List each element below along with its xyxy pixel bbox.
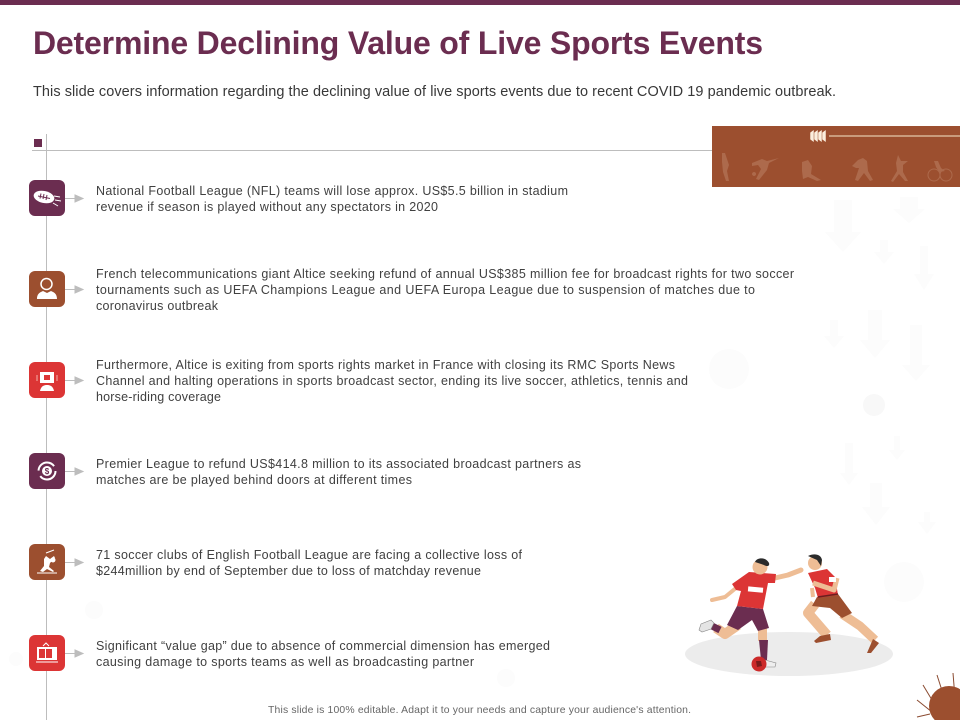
player one <box>699 558 801 672</box>
icon: broadcast monitor <box>29 362 65 398</box>
arrow <box>65 468 83 475</box>
shorts <box>727 606 769 631</box>
item 1: NFL stadium revenue <box>29 180 568 216</box>
arrow <box>65 559 83 566</box>
front leg <box>758 628 767 641</box>
icon: dollar cycle <box>29 453 65 489</box>
title: Determine Declining Value of Live Sports Events <box>33 25 763 61</box>
shorts <box>812 594 852 618</box>
icon: television <box>29 635 65 671</box>
text: tournaments such as UEFA Champions League and UEFA Europa League due to suspension of matches due to <box>96 283 755 297</box>
text <box>96 358 688 404</box>
subtitle: This slide covers information regarding the declining value of live sports events due to recent COVID 19 pandemic outbreak. <box>33 84 836 100</box>
top bar <box>0 0 960 5</box>
icon: headset agent <box>29 271 65 307</box>
jersey <box>808 569 838 598</box>
head <box>808 556 822 570</box>
back leg <box>716 625 738 634</box>
ground shadow <box>685 632 893 676</box>
text: Significant “value gap” due to absence of commercial dimension has emerged <box>96 639 550 653</box>
legs <box>808 604 827 635</box>
item 4: Premier League refund <box>29 453 581 489</box>
text: $244million by end of September due to loss of matchday revenue <box>96 564 481 578</box>
text: Channel and halting operations in sports broadcast sector, ending its live soccer, athletics, tennis and <box>96 374 688 388</box>
icon: football <box>29 180 65 216</box>
item 5: English Football League loss <box>29 544 523 580</box>
sports silhouettes <box>722 153 952 182</box>
text: National Football League (NFL) teams will lose approx. US$5.5 billion in stadium <box>96 184 568 198</box>
rear arm <box>812 588 813 597</box>
jersey <box>732 572 776 609</box>
timeline axis <box>32 134 712 720</box>
head <box>752 560 768 574</box>
text: Premier League to refund US$414.8 million to its associated broadcast partners as <box>96 457 581 471</box>
text: revenue if season is played without any spectators in 2020 <box>96 200 438 214</box>
arrow <box>65 377 83 384</box>
background: faint falling arrows and virus shapes <box>9 197 936 687</box>
text: Furthermore, Altice is exiting from sports rights market in France with closing its RMC Sports News <box>96 358 675 372</box>
text <box>96 267 794 313</box>
item 3: Altice exits sports rights <box>29 358 688 404</box>
player two <box>808 554 879 653</box>
illustration: two soccer players <box>685 554 893 676</box>
icon: virus corner <box>917 673 960 720</box>
axis marker square <box>34 139 42 147</box>
arrow <box>65 286 83 293</box>
text: matches are be played behind doors at different times <box>96 473 412 487</box>
text: French telecommunications giant Altice seeking refund of annual US$385 million fee for broadcast rights for two soccer <box>96 267 794 281</box>
arm <box>813 578 837 590</box>
text <box>96 457 581 487</box>
arms <box>712 588 736 600</box>
item 2: Altice refund <box>29 267 794 313</box>
text: 71 soccer clubs of English Football League are facing a collective loss of <box>96 548 523 562</box>
ball <box>752 656 766 672</box>
arrow <box>65 195 83 202</box>
footer note: This slide is 100% editable. Adapt it to your needs and capture your audience's attention. <box>268 705 691 716</box>
text: causing damage to sports teams as well as broadcasting partner <box>96 655 474 669</box>
text <box>96 639 550 669</box>
icon: soccer player kick <box>29 544 65 580</box>
icon: dollar cycle: $ <box>45 467 50 476</box>
item 6: value gap <box>29 635 550 671</box>
text <box>96 548 523 578</box>
banner: sports silhouettes <box>712 126 960 187</box>
text <box>96 184 568 214</box>
text: coronavirus outbreak <box>96 299 219 313</box>
arrow <box>65 650 83 657</box>
text: horse-riding coverage <box>96 390 221 404</box>
shoes <box>814 634 831 643</box>
banner chevrons and line <box>811 132 960 140</box>
